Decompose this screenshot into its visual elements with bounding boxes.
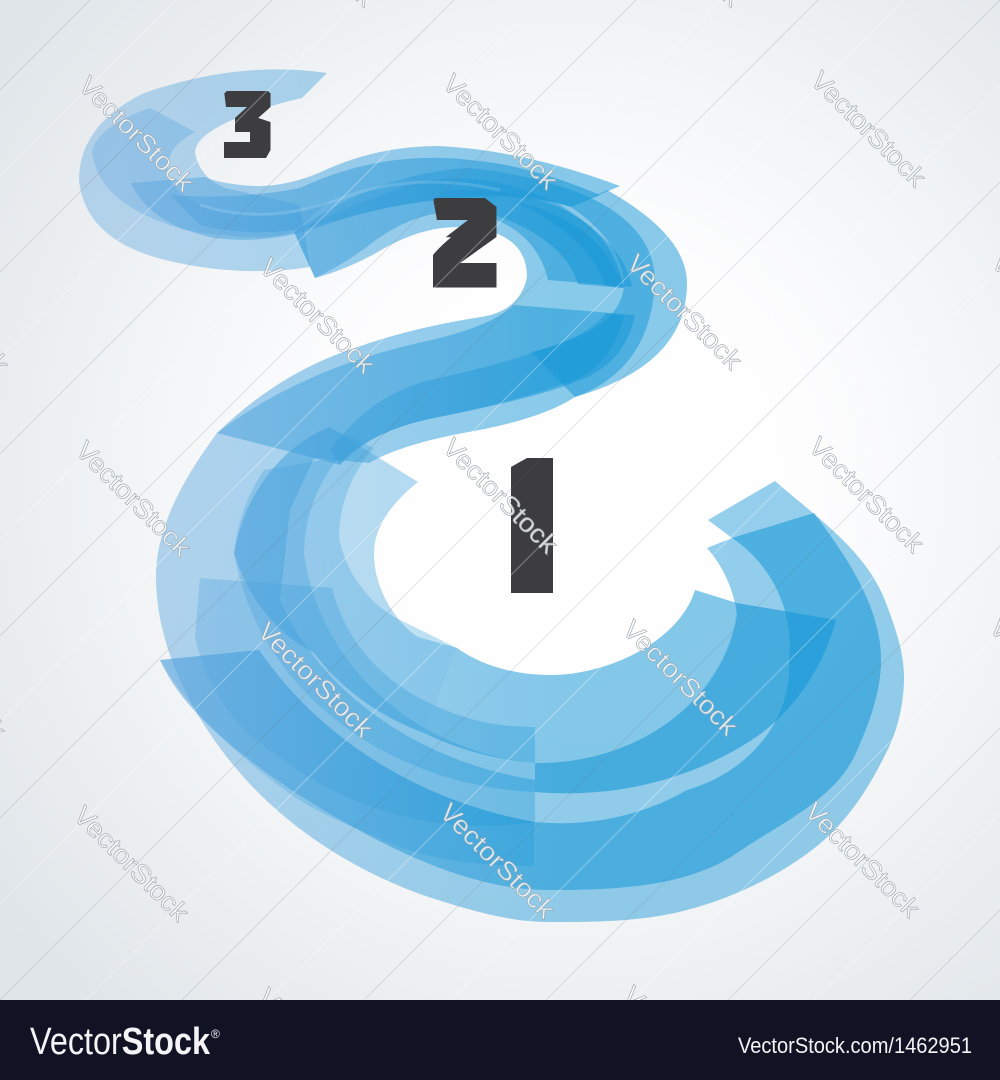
number 1: 1 — [475, 419, 582, 634]
lobe dark band — [440, 190, 624, 288]
ring layer: upper left inner band — [234, 427, 457, 733]
spiral top outer light band — [79, 69, 327, 271]
neck dark band — [330, 313, 624, 465]
ring layer: upper left band — [234, 427, 457, 733]
watermarks: VectorStock — [252, 616, 380, 744]
neck medium band — [217, 305, 635, 465]
watermarks: VectorStock — [621, 248, 749, 376]
watermarks: VectorStock — [68, 800, 196, 928]
watermarks: VectorStock — [803, 431, 931, 559]
watermarks: VectorStock — [437, 432, 565, 560]
footer logo: VectorStock — [30, 1021, 211, 1063]
watermarks: VectorStock — [70, 435, 198, 563]
watermarks: VectorStock — [73, 70, 201, 198]
ring layer: dark band with cap at right — [535, 603, 836, 793]
spiral top second band — [92, 108, 330, 237]
lobe outer band — [531, 190, 687, 397]
ring layer: outer light band — [156, 433, 904, 922]
watermarks: VectorStock — [437, 68, 565, 196]
footer image id: VectorStock.com/1462951 — [738, 1033, 972, 1058]
watermarks: VectorStock — [799, 796, 927, 924]
lobe darkest band — [510, 200, 624, 288]
registered mark: ® — [211, 1027, 220, 1041]
ring layer: left end band one — [160, 650, 534, 866]
footer band — [0, 1000, 1000, 1080]
number 2: 2 — [430, 176, 499, 314]
upper band across the top — [131, 146, 620, 240]
upper dark band — [170, 158, 600, 232]
neck and lobe main band — [217, 168, 655, 463]
ring layer: band under hole — [424, 590, 737, 763]
ring layer: right band to tip — [160, 513, 881, 890]
number 3: 3 — [222, 76, 273, 178]
watermarks: VectorStock — [434, 797, 562, 925]
stripes in the top band — [200, 182, 500, 214]
ring layer: left end band two — [195, 578, 535, 826]
band from bottom cap to lobe cap — [294, 178, 632, 287]
watermarks: VectorStock — [254, 252, 382, 380]
ring layer: dark band from upper left to bottom — [234, 457, 535, 792]
watermarks: VectorStock — [617, 614, 745, 742]
watermarks: VectorStock — [805, 65, 933, 193]
spiral ribbon — [79, 69, 904, 922]
ring layer: light inner right band — [535, 538, 790, 823]
